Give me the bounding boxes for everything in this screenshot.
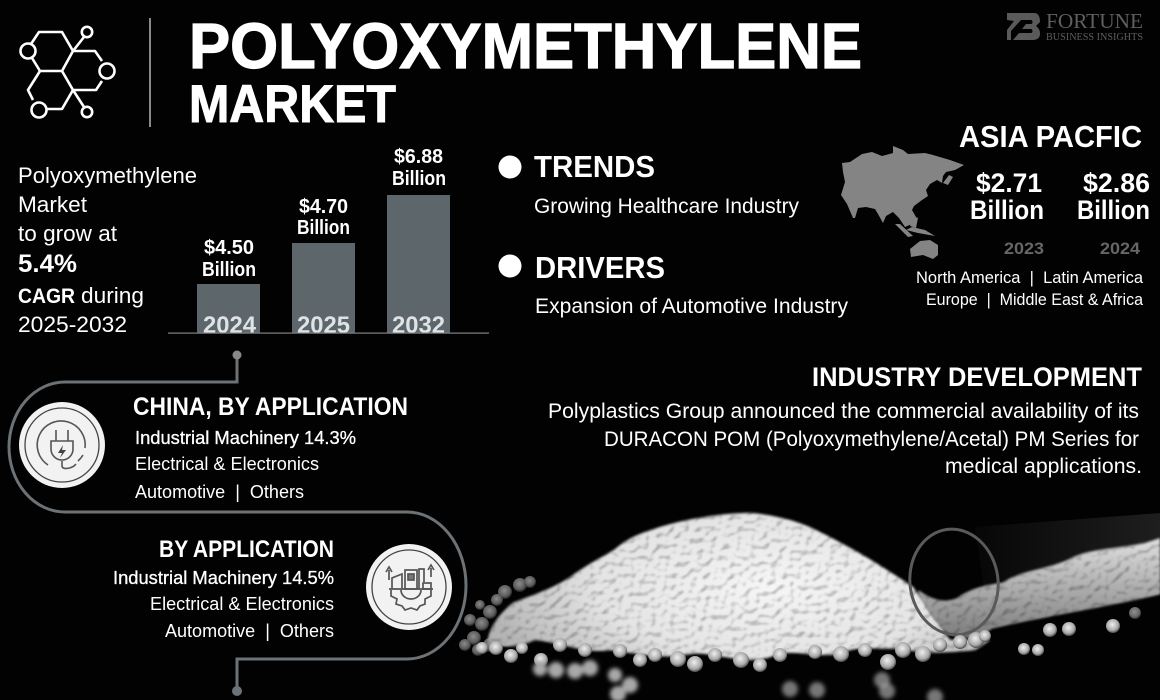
global application text: BY APPLICATION (159, 536, 334, 563)
trends block: TRENDS (534, 149, 655, 184)
Asia Pacific 2024 value: Billion (1077, 195, 1150, 225)
industry development: INDUSTRY DEVELOPMENT (812, 362, 1142, 392)
global application text: Electrical & Electronics (150, 594, 334, 614)
drivers block: DRIVERS (535, 250, 665, 285)
Asia Pacific 2023 value: 2023 (1004, 239, 1044, 258)
loose beads (476, 607, 1141, 672)
brand logo: Fortune Business Insights: FORTUNE (1046, 9, 1143, 33)
drivers block: Expansion of Automotive Industry (535, 295, 848, 318)
industry development (548, 362, 1142, 478)
icon: electric plug (19, 402, 105, 488)
bar 2024: 2024 (203, 312, 257, 339)
bar 2025: Billion (297, 217, 350, 239)
brand logo: Fortune Business Insights: BUSINESS INSIGHTS (1046, 32, 1143, 43)
bar 2032 (387, 146, 450, 339)
china application text: CHINA, BY APPLICATION (133, 393, 408, 421)
Asia Pacific 2024 value: $2.86 (1083, 168, 1150, 198)
growth summary text: during (81, 283, 144, 308)
other regions: North America | Latin America (916, 268, 1144, 287)
bar 2024: Billion (202, 259, 256, 281)
photo: polymer granules and test tube (459, 513, 1160, 700)
china application text: Automotive | Others (135, 482, 304, 502)
connector path (9, 350, 466, 696)
growth summary text: Polyoxymethylene (18, 163, 197, 188)
trends block: Growing Healthcare Industry (534, 195, 799, 218)
Asia Pacific 2023 value (970, 168, 1044, 258)
bar 2032: 2032 (392, 312, 445, 339)
bar 2025: 2025 (297, 312, 350, 339)
china application text: Electrical & Electronics (135, 454, 319, 474)
bar 2025: $4.70 (299, 196, 348, 218)
china application text (133, 393, 408, 502)
industry development: Polyplastics Group announced the commercial availability of its (548, 400, 1139, 423)
bar 2025 (292, 196, 355, 339)
granule pile (488, 513, 990, 660)
brand logo: Fortune Business Insights (1007, 9, 1143, 43)
industry development: medical applications. (945, 455, 1142, 478)
test tube rim (903, 523, 1005, 641)
growth summary text (18, 163, 197, 337)
bar chart: market size (168, 146, 489, 339)
global application text: Industrial Machinery 14.5% (113, 568, 334, 588)
growth summary text: 2025-2032 (18, 312, 127, 337)
trends block (498, 149, 799, 218)
dim beads left of pile (459, 576, 536, 656)
icon: factory on gear (366, 544, 452, 630)
growth summary text: CAGR (18, 285, 75, 308)
logo icon: molecule (20, 27, 114, 117)
drivers block (498, 250, 848, 318)
Asia Pacific 2023 value: Billion (970, 195, 1044, 225)
industry development: DURACON POM (Polyoxymethylene/Acetal) PM Series for (604, 428, 1139, 451)
bar 2024 (197, 237, 260, 339)
out-of-focus foreground beads (533, 660, 943, 700)
china application text: Industrial Machinery 14.3% (135, 428, 356, 448)
global application text (113, 536, 334, 641)
bar 2032: $6.88 (394, 146, 443, 168)
bar 2024: $4.50 (204, 237, 254, 259)
Asia Pacific 2023 value: $2.71 (976, 168, 1042, 198)
global application text: Automotive | Others (165, 621, 334, 641)
map: Asia Pacific (841, 146, 964, 259)
title: POLYOXYMETHYLENE (189, 10, 862, 82)
Asia Pacific 2024 value: 2024 (1100, 239, 1141, 258)
other regions (916, 268, 1144, 309)
growth summary text: 5.4% (18, 250, 77, 278)
bar 2032: Billion (392, 168, 446, 190)
granules inside tube (918, 538, 1160, 637)
other regions: Europe | Middle East & Africa (926, 290, 1144, 309)
growth summary text: to grow at (18, 221, 117, 246)
test tube body (975, 513, 1160, 628)
title: MARKET (189, 75, 396, 134)
header divider (149, 18, 151, 127)
growth summary text: Market (18, 192, 87, 217)
Asia Pacific heading: ASIA PACFIC (959, 119, 1142, 154)
title (189, 10, 862, 134)
Asia Pacific 2024 value (1077, 168, 1150, 258)
